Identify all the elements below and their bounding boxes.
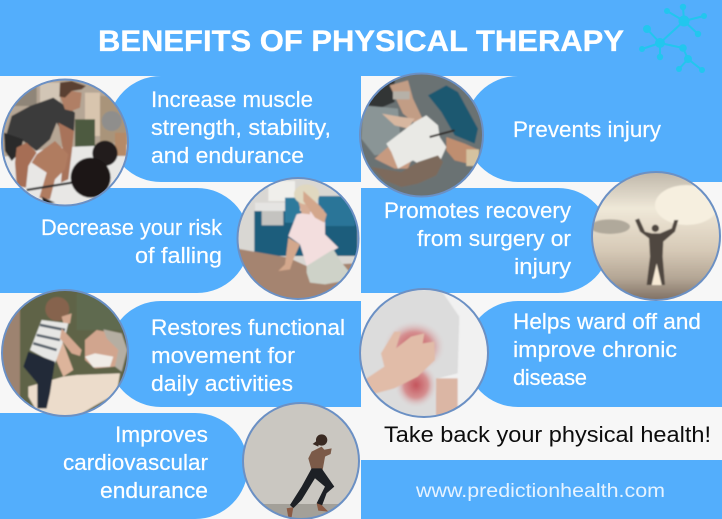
text: chronic disease: disease [513, 365, 587, 390]
panel: falling risk band [0, 188, 250, 293]
text: increase muscle strength: strength, stability, [151, 115, 331, 140]
panel: chronic disease band [465, 301, 722, 407]
text: restores functional movement [151, 315, 345, 396]
call to action: Take back your physical health! [384, 422, 711, 447]
text: cardiovascular endurance: Improves [115, 422, 208, 447]
photo: woman running [242, 402, 360, 519]
text: promotes recovery: Promotes recovery [384, 198, 571, 223]
text: restores functional movement: Restores functional [151, 315, 345, 340]
text: decrease falling risk: Decrease your risk [41, 215, 223, 240]
header band [0, 0, 722, 76]
text: prevents injury: Prevents injury [513, 117, 661, 142]
text: chronic disease [513, 309, 701, 390]
text: cardiovascular endurance: cardiovascular [63, 450, 208, 475]
text: cardiovascular endurance [63, 422, 208, 503]
text: restores functional movement: daily activities [151, 371, 293, 396]
photo: older woman on floor [236, 177, 360, 300]
panel: functional movement band [108, 301, 361, 407]
photo: man lifting barbell [1, 78, 129, 206]
text: decrease falling risk [41, 215, 223, 268]
text: increase muscle strength: Increase muscle [151, 87, 313, 112]
panel: website footer band [361, 460, 722, 519]
photo: hands wrapping bandage [359, 72, 484, 198]
panel: prevents injury band [465, 76, 722, 182]
photo: grandfather lifting child [1, 289, 129, 417]
photo: hand on aching chest [359, 288, 489, 418]
text: increase muscle strength: and endurance [151, 143, 304, 168]
title: BENEFITS OF PHYSICAL THERAPY [98, 25, 624, 58]
website url: www.predictionhealth.com [415, 481, 665, 502]
text: chronic disease: improve chronic [513, 337, 677, 362]
icon: molecule network [639, 4, 707, 73]
photo: silhouette at sunrise [591, 171, 721, 301]
panel: muscle strength band [108, 76, 361, 182]
text: restores functional movement: movement for [151, 343, 295, 368]
panel: recovery band [361, 188, 610, 293]
panel: cardiovascular band [0, 413, 248, 519]
text: decrease falling risk: of falling [135, 243, 222, 268]
text: cardiovascular endurance: endurance [100, 478, 208, 503]
text: chronic disease: Helps ward off and [513, 309, 701, 334]
text: promotes recovery [384, 198, 571, 279]
text: increase muscle strength [151, 87, 331, 168]
text: promotes recovery: from surgery or [417, 226, 571, 251]
text: promotes recovery: injury [514, 254, 571, 279]
